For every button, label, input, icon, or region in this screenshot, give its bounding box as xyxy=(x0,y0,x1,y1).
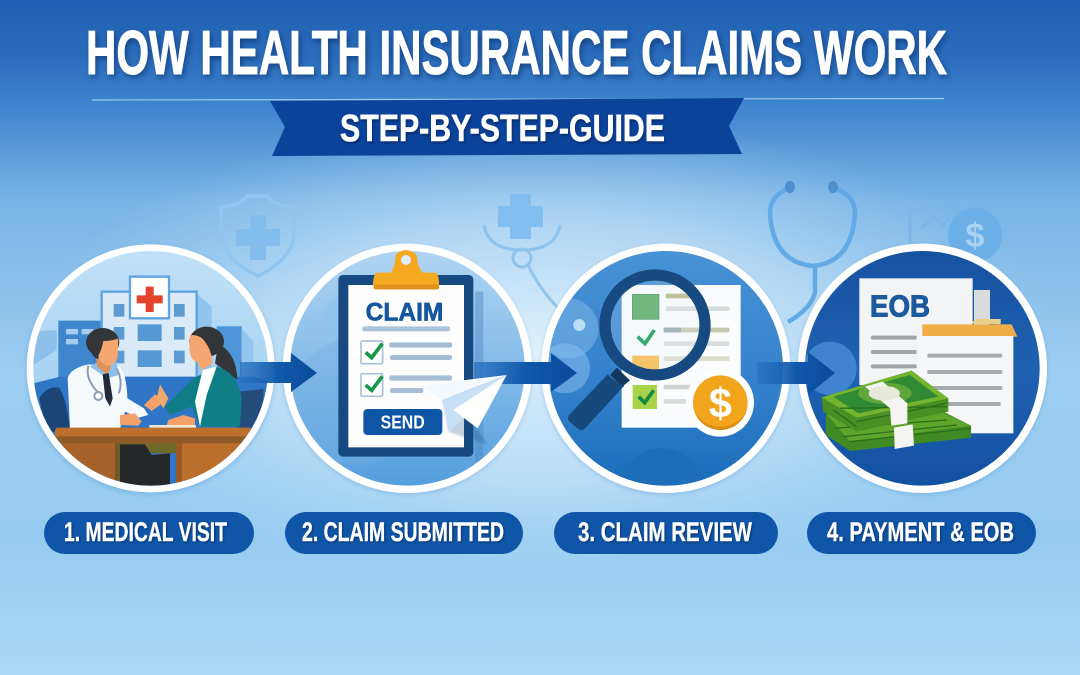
label: 4. payment and EOB: 4. PAYMENT & EOB xyxy=(827,517,1014,547)
label: 1. medical visit xyxy=(44,512,254,554)
icon: background plus with stethoscope xyxy=(484,194,560,310)
icon: review document xyxy=(622,285,741,428)
subtitle ribbon xyxy=(270,98,744,156)
label: 2. claim submitted xyxy=(285,512,523,554)
icon: clipboard xyxy=(338,250,473,457)
icon: paper plane xyxy=(419,375,507,445)
label: 1. medical visit: 1. MEDICAL VISIT xyxy=(64,517,227,547)
icon: background chart and dollar xyxy=(910,201,1002,262)
icon: orange clip xyxy=(373,250,439,289)
arrow: review to payment xyxy=(757,352,835,395)
panel: step 1 medical visit xyxy=(25,244,276,496)
icon: EOB documents xyxy=(859,278,1017,433)
subtitle: STEP-BY-STEP-GUIDE xyxy=(340,108,665,150)
icon: dollar coin: $ xyxy=(709,380,732,426)
header divider line xyxy=(92,98,944,100)
doctor xyxy=(68,328,162,428)
arrow: visit to claim xyxy=(240,353,317,392)
panel: step 3 claim review xyxy=(540,244,792,496)
claim heading: CLAIM xyxy=(366,298,443,326)
arrow: claim to review xyxy=(474,353,577,392)
checklist xyxy=(361,341,452,396)
label: 3. claim review xyxy=(554,512,778,554)
send button xyxy=(363,409,442,435)
label: 4. payment and EOB xyxy=(807,512,1036,554)
desk xyxy=(55,428,252,486)
label: 2. claim submitted: 2. CLAIM SUBMITTED xyxy=(302,517,504,547)
label: 3. claim review: 3. CLAIM REVIEW xyxy=(578,517,752,547)
patient xyxy=(149,327,242,428)
icon: background chart and dollar: $ xyxy=(966,217,985,255)
icon: hospital xyxy=(58,277,253,384)
EOB label: EOB xyxy=(870,290,930,324)
icon: background shield with cross xyxy=(221,196,294,276)
panel: step 2 claim submitted xyxy=(282,244,534,496)
send button: SEND xyxy=(381,411,425,432)
icon: background stethoscope xyxy=(770,181,855,322)
icon: chairs xyxy=(39,387,263,432)
icon: dollar coin xyxy=(686,369,754,437)
icon: cash stacks xyxy=(822,371,971,451)
panel: step 4 payment and EOB xyxy=(796,244,1048,496)
icon: magnifying glass xyxy=(568,275,705,430)
